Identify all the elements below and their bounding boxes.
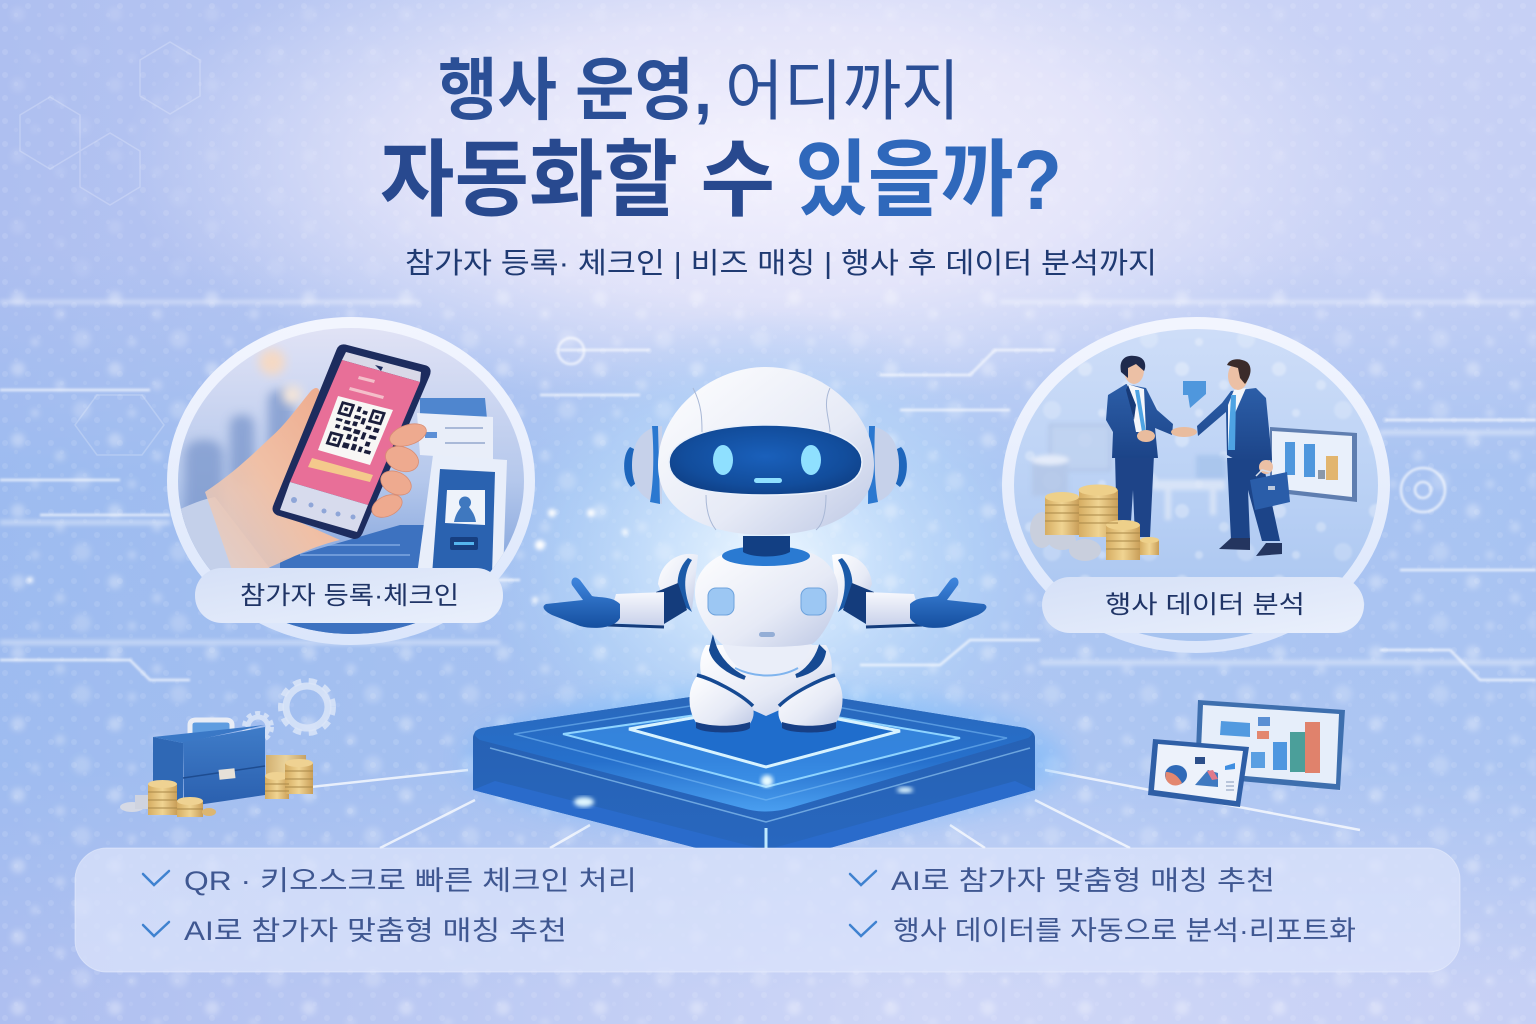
panel: registration and check-in xyxy=(170,320,540,640)
right businessman xyxy=(1197,359,1282,556)
chest panels xyxy=(708,588,826,615)
eyes xyxy=(713,445,821,483)
visor xyxy=(669,425,862,495)
collar and neck xyxy=(722,536,810,566)
label: registration xyxy=(195,568,503,623)
feature: AI matching left: AI로 참가자 맞춤형 매칭 추천 xyxy=(184,916,567,946)
platform xyxy=(466,686,1066,866)
feature: automated reports: 행사 데이터를 자동으로 분석·리포트화 xyxy=(893,916,1356,946)
briefcase xyxy=(1250,470,1290,510)
ears xyxy=(624,426,907,504)
title: 어디까지 xyxy=(725,54,960,128)
title: 자동화할 수 xyxy=(380,133,775,227)
left arm xyxy=(544,554,698,628)
fingers xyxy=(368,420,429,522)
phone xyxy=(274,346,429,538)
right arm xyxy=(832,554,986,628)
feature: AI matching right: AI로 참가자 맞춤형 매칭 추천 xyxy=(891,866,1275,896)
head xyxy=(658,367,874,535)
title xyxy=(380,53,1062,227)
legs xyxy=(689,675,843,732)
panel: feature checklist xyxy=(75,848,1460,972)
coin stacks xyxy=(1030,484,1159,561)
robot xyxy=(544,367,986,732)
label: registration: 참가자 등록·체크인 xyxy=(240,582,459,610)
handshake xyxy=(1171,427,1197,437)
hips xyxy=(700,642,832,716)
feature: QR kiosk check-in: QR · 키오스크로 빠른 체크인 처리 xyxy=(184,866,637,896)
chart monitor xyxy=(1270,427,1357,502)
title: 행사 운영, xyxy=(438,53,712,129)
speech bubble xyxy=(1183,381,1206,408)
label: data analysis: 행사 데이터 분석 xyxy=(1105,591,1305,619)
title: 있을까? xyxy=(795,133,1062,227)
icon: analytics dashboards xyxy=(1148,700,1345,807)
torso xyxy=(695,548,838,647)
left businessman xyxy=(1106,356,1173,537)
panel: event data analysis xyxy=(1005,320,1390,647)
label: data analysis xyxy=(1042,577,1364,633)
icon: briefcase with coins and gears xyxy=(120,681,333,817)
QR code xyxy=(326,401,386,456)
subtitle: 참가자 등록· 체크인 | 비즈 매칭 | 행사 후 데이터 분석까지 xyxy=(405,247,1157,280)
